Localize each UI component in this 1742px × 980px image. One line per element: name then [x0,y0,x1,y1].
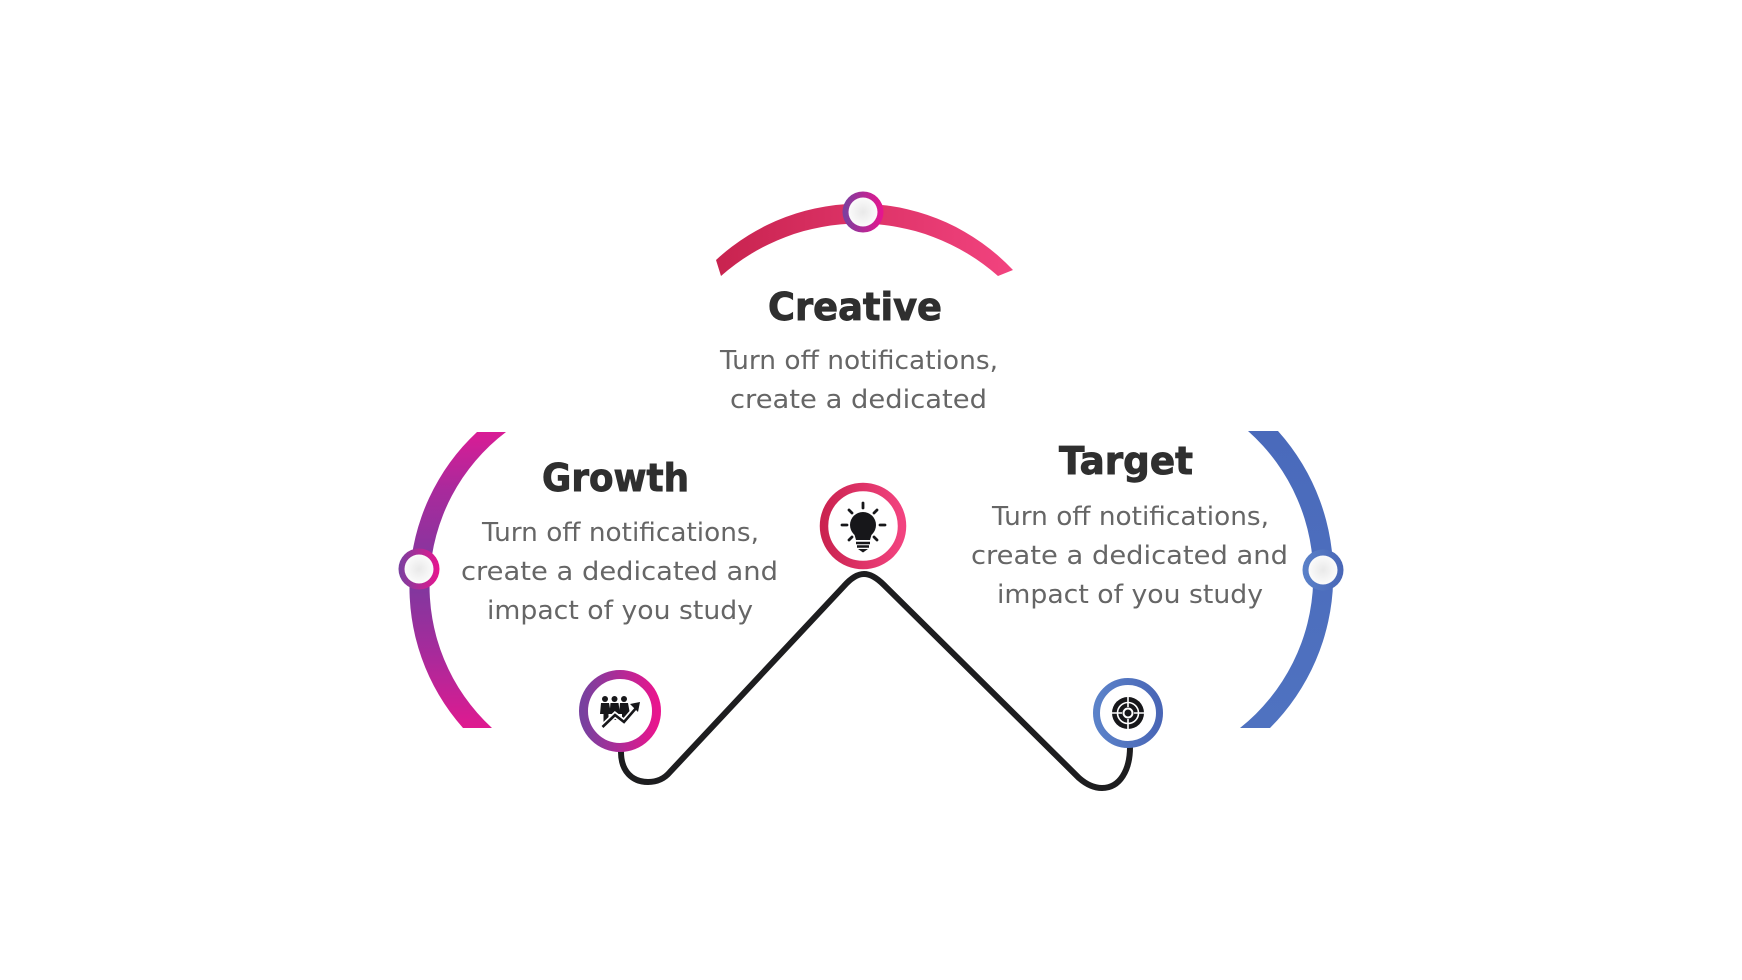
text: growth description: impact of you study [487,596,753,626]
heading: Growth: Growth [542,456,689,501]
text: creative description: create a dedicated [730,385,987,415]
text: target description: Turn off notifications, [991,502,1269,532]
icon: target [1096,682,1160,744]
text: target description: create a dedicated and [971,541,1288,571]
text: creative description: Turn off notifications, [719,346,998,376]
top arc node [842,192,884,232]
connector line [621,574,1130,788]
panel: target [971,431,1344,744]
left arc [409,432,506,728]
top arc [716,204,1013,276]
text: growth description: Turn off notifications, [481,518,759,548]
heading: Creative: Creative [768,285,942,330]
text: target description: impact of you study [997,580,1263,610]
text: growth description [461,518,778,626]
icon: light bulb [824,487,902,565]
panel: growth [398,432,778,748]
left arc node [398,548,440,590]
text: creative description [719,346,998,415]
icon: people and growth arrow [584,674,656,748]
text: target description [971,502,1288,610]
text: growth description: create a dedicated and [461,557,778,587]
right arc node [1302,550,1344,590]
panel: creative [716,192,1013,565]
right arc [1240,431,1333,728]
heading: Target: Target [1059,439,1193,484]
